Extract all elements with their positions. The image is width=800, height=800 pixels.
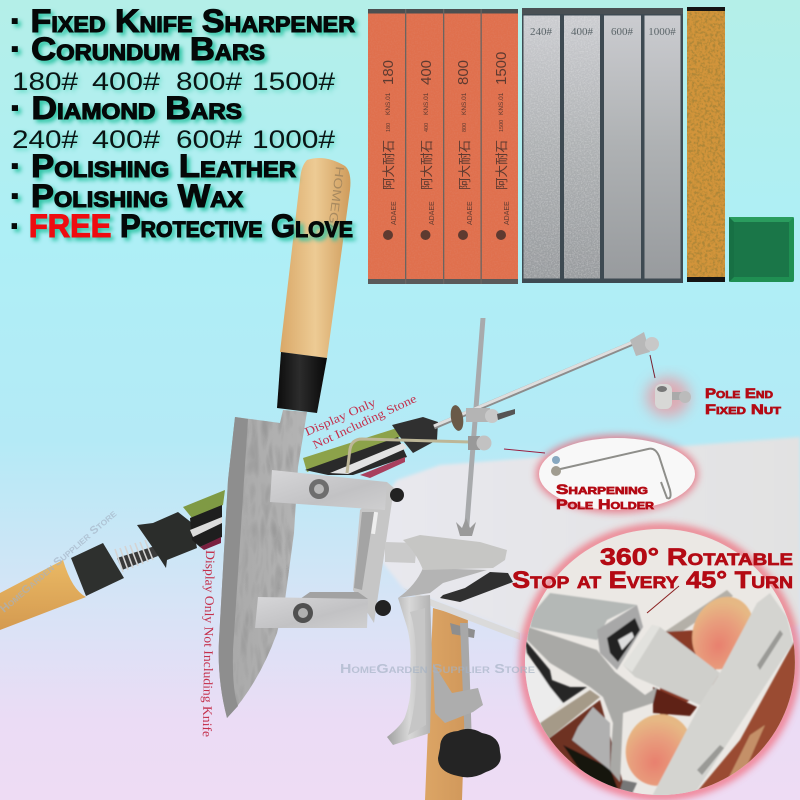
pole (434, 343, 633, 427)
leader line (647, 586, 679, 613)
clamp back bracket (300, 482, 404, 623)
bar 1500: KNS.01 (498, 92, 505, 115)
diamond grit numbers (12, 126, 335, 154)
wood leg (425, 608, 468, 800)
bar 180: 180 (380, 60, 397, 85)
ellipse glow (536, 435, 698, 513)
circle glow (524, 528, 796, 796)
clamp silver bars (255, 470, 387, 628)
polishing leather (687, 7, 725, 282)
housing foot (440, 572, 513, 602)
bar 1500: ADAEE (504, 201, 511, 225)
blade bevel (219, 417, 248, 718)
bar 1500: 1500 (499, 120, 505, 132)
callout: sharpening pole holder (504, 435, 698, 513)
bar 400: KNS.01 (423, 92, 430, 115)
green stone (183, 490, 225, 518)
callout: pole end fixed nut: Fixed Nut (705, 401, 781, 417)
bar 180 (380, 60, 398, 240)
bar 800: 阿大耐石 (458, 140, 472, 190)
clamp arm (433, 663, 483, 723)
polishing wax (729, 217, 794, 282)
nut (655, 384, 691, 409)
callout: 360 rotatable (512, 520, 800, 800)
heading: fixed knife sharpener: · Fixed Knife Sharpener (10, 3, 355, 39)
holder knob (468, 436, 492, 450)
cast body (387, 595, 432, 745)
finger top (691, 596, 752, 670)
blade (219, 410, 307, 718)
side bar (385, 542, 417, 563)
finger bottom (624, 713, 688, 786)
bar 400: 400 (418, 60, 435, 85)
bar 1500: 阿大耐石 (495, 140, 509, 190)
bar 800 (455, 60, 474, 240)
diamond grit labels: 600# (611, 26, 634, 38)
heading: polishing wax: · Polishing Wax (10, 178, 243, 214)
note: display only knife: Display Only Not Including Knife (200, 550, 218, 737)
vertical post (464, 318, 486, 530)
bar 800: KNS.01 (461, 92, 468, 115)
lower clamp bar (255, 597, 368, 628)
pole end nut (630, 332, 659, 356)
wing nut (456, 518, 476, 536)
holder rod (347, 439, 470, 473)
corundum grit numbers: 180# (12, 68, 78, 96)
black end block (71, 543, 124, 596)
leader line (504, 449, 545, 453)
upper screw bracket (450, 623, 475, 638)
frame (650, 593, 793, 800)
upper stone assembly (303, 417, 438, 478)
bar 180: 阿大耐石 (382, 140, 396, 190)
upper clamp bar (270, 470, 387, 510)
clamp screw (460, 623, 472, 745)
diamond grit labels: 240# (530, 26, 552, 38)
heading: corundum bars: · Corundum Bars (10, 31, 265, 67)
stand base (385, 535, 520, 800)
corundum grit numbers: 800# (176, 68, 242, 96)
eye bolt (551, 456, 561, 476)
sharpener rod and stand (303, 318, 659, 536)
table slab (403, 588, 520, 640)
bar 180: ADAEE (391, 201, 398, 225)
bar 1500: 1500 (493, 52, 510, 85)
note: display only stone: Not Including Stone (310, 391, 419, 452)
close-up scene (523, 588, 800, 800)
wooden grip (0, 560, 86, 630)
leader line (650, 355, 655, 378)
body recess (408, 608, 426, 735)
callout: pole end fixed nut (646, 355, 781, 417)
spring (115, 540, 158, 572)
knife handle (280, 158, 350, 358)
callout: sharpening pole holder: Pole Holder (556, 496, 655, 512)
diamond grit labels (530, 26, 676, 38)
bar 400 (418, 60, 436, 240)
corundum grit numbers: 400# (92, 68, 160, 96)
bar 800: 800 (455, 60, 472, 85)
ferrule (277, 352, 327, 413)
corundum bars (368, 9, 518, 284)
hook rod (556, 449, 671, 498)
bar 180: 180 (386, 123, 392, 132)
clamp knob (438, 729, 501, 777)
bar 800: ADAEE (467, 201, 474, 225)
neck (398, 568, 487, 598)
rotatable text line 1: 360° Rotatable (600, 544, 793, 571)
circle close-up photo (520, 520, 800, 800)
heading: polishing leather: · Polishing Leather (10, 148, 296, 184)
holder label: Sharpening (556, 481, 648, 497)
corundum grit numbers (12, 68, 335, 96)
diamond grit numbers: 1000# (252, 126, 335, 154)
diamond grit labels: 1000# (648, 26, 676, 38)
note: display only stone: Display Only (303, 395, 378, 439)
bar 400: 阿大耐石 (420, 140, 434, 190)
rotatable text line 2: Stop at Every 45° Turn (512, 567, 793, 594)
table top (380, 437, 800, 640)
pivot clamp (449, 404, 515, 432)
square shaft (623, 625, 720, 705)
handle imprint: HOMEGA (325, 166, 347, 235)
heading: free protective glove: · FREE Protective Glove (10, 208, 353, 244)
watermark: horizontal: HomeGarden Supplier Store (340, 661, 535, 676)
white ellipse (539, 438, 695, 510)
nut label: Pole End (705, 385, 773, 401)
feature list (10, 3, 355, 154)
corundum grit numbers: 1500# (252, 68, 335, 96)
knife blade and ferrule (219, 352, 327, 718)
bar 1500 (493, 52, 511, 240)
heading: diamond bars: · Diamond Bars (10, 90, 242, 126)
watermark: diagonal: HomeGarden Supplier Store (0, 507, 120, 615)
bar 400: 400 (424, 123, 430, 132)
diamond grit numbers: 240# (12, 126, 78, 154)
diamond grit numbers: 400# (92, 126, 160, 154)
bar 400: ADAEE (429, 201, 436, 225)
diamond grit numbers: 600# (176, 126, 242, 154)
diamond grit labels: 400# (571, 26, 594, 38)
list lines overlapping the handle (10, 148, 353, 244)
glow (646, 377, 690, 417)
bar 180: KNS.01 (385, 92, 392, 115)
top housing (403, 535, 507, 570)
diamond bars (522, 8, 683, 283)
black collar (137, 512, 197, 568)
bar 800: 800 (462, 123, 468, 132)
lower stone grip (0, 490, 225, 630)
